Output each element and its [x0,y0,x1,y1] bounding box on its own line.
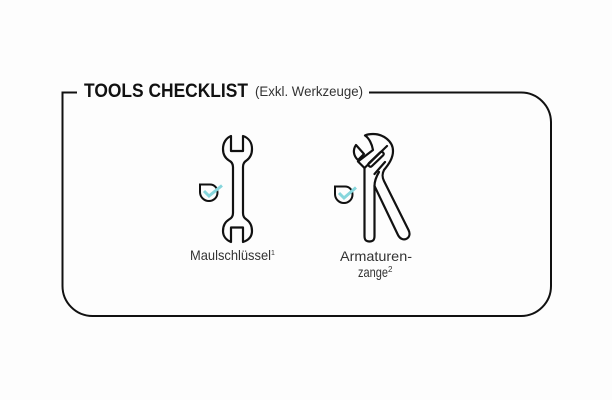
panel: tools checklist frame [62,92,551,316]
label: Maulschlüssel: 1 [271,250,275,257]
heading: tools checklist: TOOLS CHECKLIST [84,81,248,102]
icon: open-end wrench [223,136,252,242]
icon: check mark drop for wrench [200,184,222,201]
label: Armaturenzange: Armaturen- [340,248,412,264]
label: Maulschlüssel: Maulschlüssel [190,247,271,263]
icon: water pump pliers [354,134,409,242]
icon: check mark drop for pliers [335,186,356,203]
label: Armaturenzange: 2 [388,265,393,274]
label: Armaturenzange: zange [358,264,388,280]
label: Armaturenzange [340,248,412,280]
subheading: excluded tools: (Exkl. Werkzeuge) [255,84,363,99]
